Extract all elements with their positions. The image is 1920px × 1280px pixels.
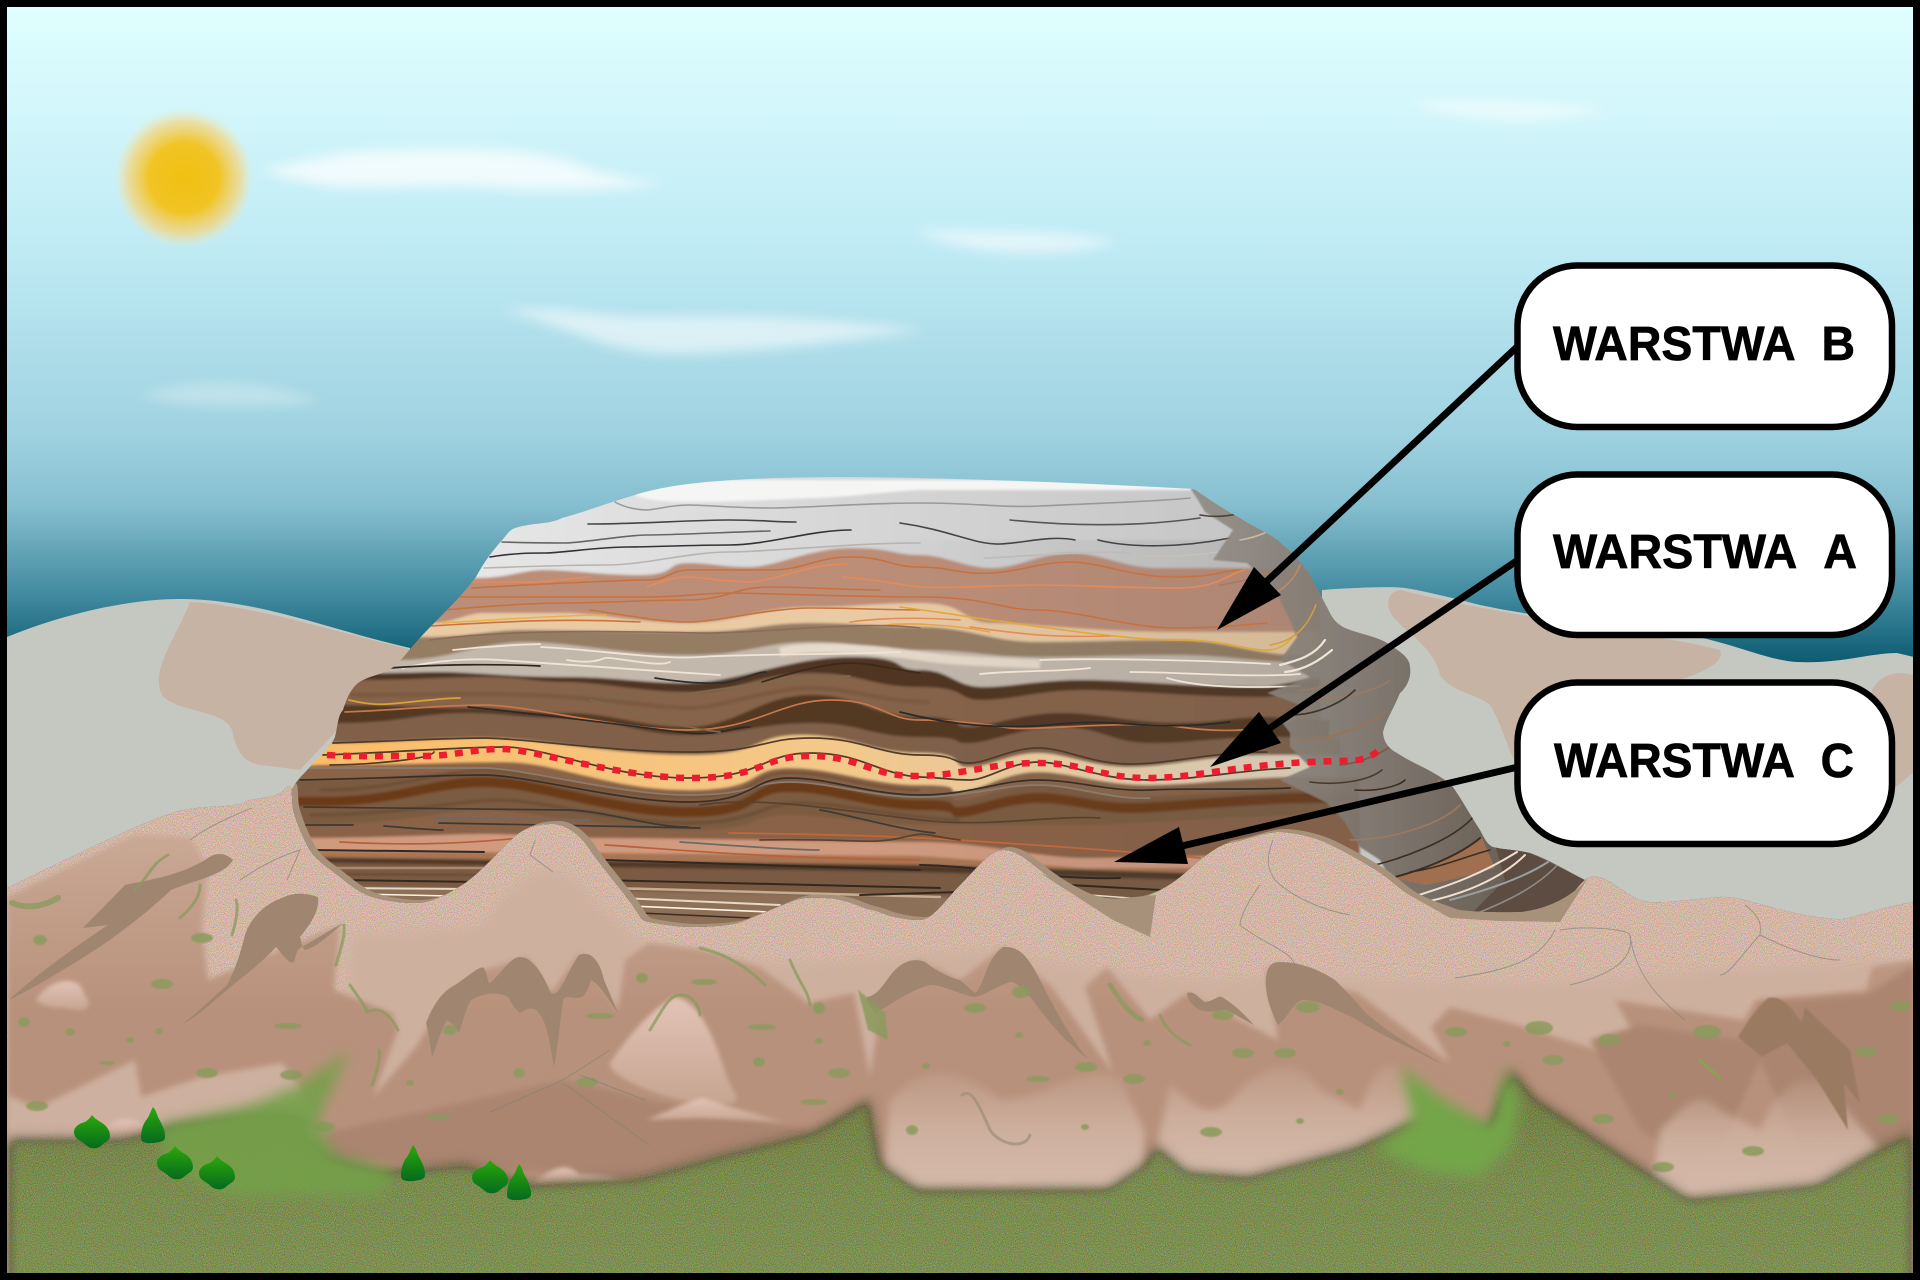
clouds (138, 100, 1610, 406)
tree 2 (141, 1107, 165, 1143)
label: layer B: WARSTWA B (1553, 318, 1855, 371)
brown band 8 (319, 851, 1192, 874)
right hill (1322, 587, 1914, 950)
olive band (400, 622, 1285, 663)
left beige patch (159, 602, 412, 770)
far right beige patch (1860, 673, 1914, 792)
slope strokes (1200, 505, 1560, 912)
cloud 4 (500, 309, 925, 354)
lower right deeper rock (1590, 965, 1914, 1160)
icon: sun (114, 108, 254, 248)
strata lines in pale grey layer (402, 644, 1300, 687)
tan band (420, 602, 1298, 656)
bright green patch right (1376, 1067, 1520, 1177)
arrow to layer A (1210, 560, 1518, 767)
ground meadow (7, 1067, 1914, 1280)
yellow marker band (310, 733, 1311, 794)
soft texture streaks (310, 688, 960, 823)
trees (74, 1107, 531, 1200)
label: layer C (1518, 682, 1892, 844)
bright green patch left (160, 1050, 395, 1195)
rock cracks (190, 808, 1840, 1145)
strata lines in grey layer (484, 498, 1235, 568)
tree 7 (507, 1164, 531, 1200)
pale highlight strip (780, 648, 1040, 664)
pale grey band (377, 640, 1310, 689)
strata lines in dark brown layers (345, 663, 1295, 734)
brown band 3 (332, 712, 1298, 768)
strata lines in marker and lower bands (300, 738, 1290, 860)
strata bands (292, 477, 1362, 924)
tree 4 (199, 1156, 235, 1189)
lower brown base (330, 862, 1178, 898)
cloud 2 (1408, 100, 1610, 120)
darker lower rock (7, 835, 1914, 1280)
dark band 2 (338, 694, 1328, 744)
smooth central slope (340, 870, 1914, 1100)
foreground mountains (7, 786, 1914, 1280)
brown band 5 (296, 772, 1304, 807)
cloud 3 (912, 230, 1118, 253)
mid brown band (344, 672, 1299, 728)
rim at base of slope (1413, 878, 1588, 922)
cloud 1 (258, 149, 665, 190)
brown band 4 (296, 760, 1358, 802)
pale rock patches (36, 981, 1020, 1192)
tree 5 (401, 1145, 425, 1181)
lower horizontal strata stripes (311, 850, 1160, 918)
tree 3 (157, 1146, 193, 1179)
tree 1 (74, 1115, 110, 1148)
brown wedge in lower slope (1389, 838, 1495, 885)
sand lobes (882, 1065, 1880, 1200)
dark band 1 (360, 656, 1317, 702)
brown outcrops (9, 854, 1444, 1067)
arrow to layer B (1217, 346, 1518, 630)
sand base (7, 786, 1914, 1280)
distant hills (7, 587, 1914, 950)
grey top layer (474, 477, 1362, 854)
dark red band (298, 776, 1326, 818)
label: layer B (1518, 266, 1892, 427)
label: layer C: WARSTWA C (1554, 735, 1854, 788)
right shading (1018, 540, 1322, 872)
tree 6 (472, 1160, 508, 1193)
moss patches (18, 933, 1911, 1172)
cloud 5 (138, 384, 322, 406)
strata lines in brown layer (430, 557, 1313, 650)
brown band 6 (299, 786, 1338, 830)
lower stripes base (362, 886, 949, 924)
sky background (0, 0, 1920, 1000)
rim wedge between peaks (1040, 873, 1156, 937)
lower left sand (7, 1060, 312, 1145)
dark base of slope (1470, 845, 1585, 925)
left hill (7, 599, 410, 950)
moss streaks (12, 855, 1720, 1144)
layer C pink band (310, 832, 1207, 870)
layer A dotted red line (327, 747, 1382, 778)
foreground rim shadow (13, 783, 1920, 1277)
arrow to layer C (1114, 767, 1518, 864)
label: layer A: WARSTWA A (1553, 526, 1857, 579)
grey eroded right slope (1190, 488, 1585, 912)
mesa with rock strata (292, 477, 1585, 924)
brown band 7 (306, 810, 1360, 858)
right beige patch (1388, 590, 1721, 760)
layer B brown (433, 546, 1320, 634)
moss wedge (858, 990, 888, 1040)
right brown outcrop (1738, 997, 1860, 1130)
label: layer A (1518, 474, 1892, 635)
dark band 3 (324, 856, 1186, 881)
white cap (620, 480, 1200, 502)
lower central triangular rock (325, 1080, 808, 1178)
